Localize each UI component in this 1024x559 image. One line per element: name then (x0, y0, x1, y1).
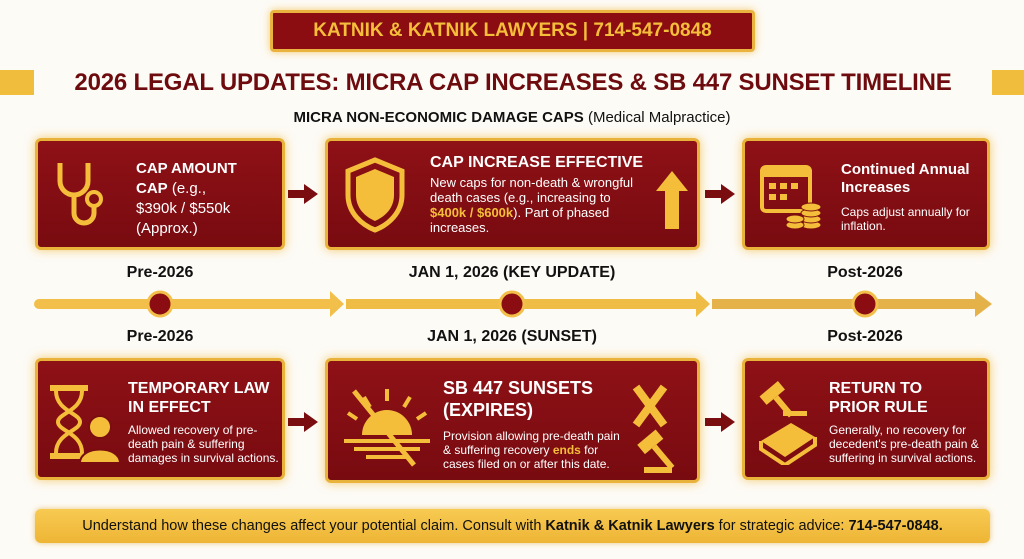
panel: return to prior rule (742, 358, 990, 480)
labels: top timeline: Pre-2026 (127, 264, 193, 281)
text (841, 161, 970, 233)
text (829, 380, 979, 465)
text: cap amount: CAP (e.g., (136, 180, 206, 197)
text: Continued Annual Increases (841, 161, 970, 196)
text: (EXPIRES) (443, 400, 533, 420)
text: JAN 1, 2026 (SUNSET) (427, 328, 597, 345)
subtitle: MICRA NON-ECONOMIC DAMAGE CAPS (Medical Malpractice) (294, 109, 730, 126)
panel: continued annual increases (742, 138, 990, 250)
text: JAN 1, 2026 (KEY UPDATE) (409, 264, 615, 281)
panel: cap increase effective (325, 138, 700, 250)
text: Allowed recovery of pre-death pain & suffering damages in survival actions. (128, 423, 279, 465)
text: RETURN TO (829, 380, 922, 397)
arrow (705, 184, 735, 204)
icon: sunset crossed (344, 389, 430, 467)
footer call to action: Understand how these changes affect your potential claim. Consult with Katnik & Katnik Lawyers for strategic advice: 714-547-0848. (82, 518, 943, 534)
footer call to action (35, 509, 990, 543)
panel: temporary law in effect (35, 358, 285, 480)
timeline (34, 290, 992, 318)
arrow (288, 184, 318, 204)
icon: calendar with coins (760, 165, 820, 228)
text: cap amount (136, 160, 237, 237)
icon: stethoscope (58, 163, 103, 226)
text: cap amount: (Approx.) (136, 220, 198, 237)
text: Post-2026 (827, 328, 903, 345)
arrow (288, 412, 318, 432)
panel: SB 447 sunsets (325, 358, 700, 483)
text: Post-2026 (827, 264, 903, 281)
icon: shield (346, 157, 404, 233)
arrow (705, 412, 735, 432)
text: SB 447 SUNSETS (443, 378, 593, 398)
icon: up arrow (656, 171, 688, 229)
header: firm name (270, 10, 755, 52)
text: TEMPORARY LAW IN EFFECT (128, 380, 269, 416)
text: cap amount: CAP AMOUNT (136, 160, 237, 177)
text: Caps adjust annually for inflation. (841, 205, 970, 233)
text (128, 380, 279, 465)
labels: bottom timeline: Pre-2026 (127, 328, 193, 345)
title: 2026 LEGAL UPDATES: MICRA CAP INCREASES & SB 447 SUNSET TIMELINE (74, 69, 952, 96)
decorative gold bars (0, 70, 34, 95)
panel: pre-2026 cap amount (35, 138, 285, 250)
header: firm name: KATNIK & KATNIK LAWYERS | 714-547-0848 (313, 20, 712, 41)
text: New caps for non-death & wrongful death cases (e.g., increasing to $400k / $600k). Part of phased increases. (430, 175, 633, 235)
text: PRIOR RULE (829, 399, 928, 416)
text: CAP INCREASE EFFECTIVE (430, 154, 643, 171)
icon: hourglass with person (50, 385, 119, 462)
text (443, 378, 620, 471)
icon: X and gavel (632, 384, 674, 473)
icon: gavel and book (759, 381, 817, 465)
text: cap amount: $390k / $550k (136, 200, 230, 217)
text: Provision allowing pre-death pain & suffering recovery ends for cases filed on or after this date. (443, 429, 620, 471)
text: Generally, no recovery for decedent's pre-death pain & suffering in survival actions. (829, 423, 979, 465)
